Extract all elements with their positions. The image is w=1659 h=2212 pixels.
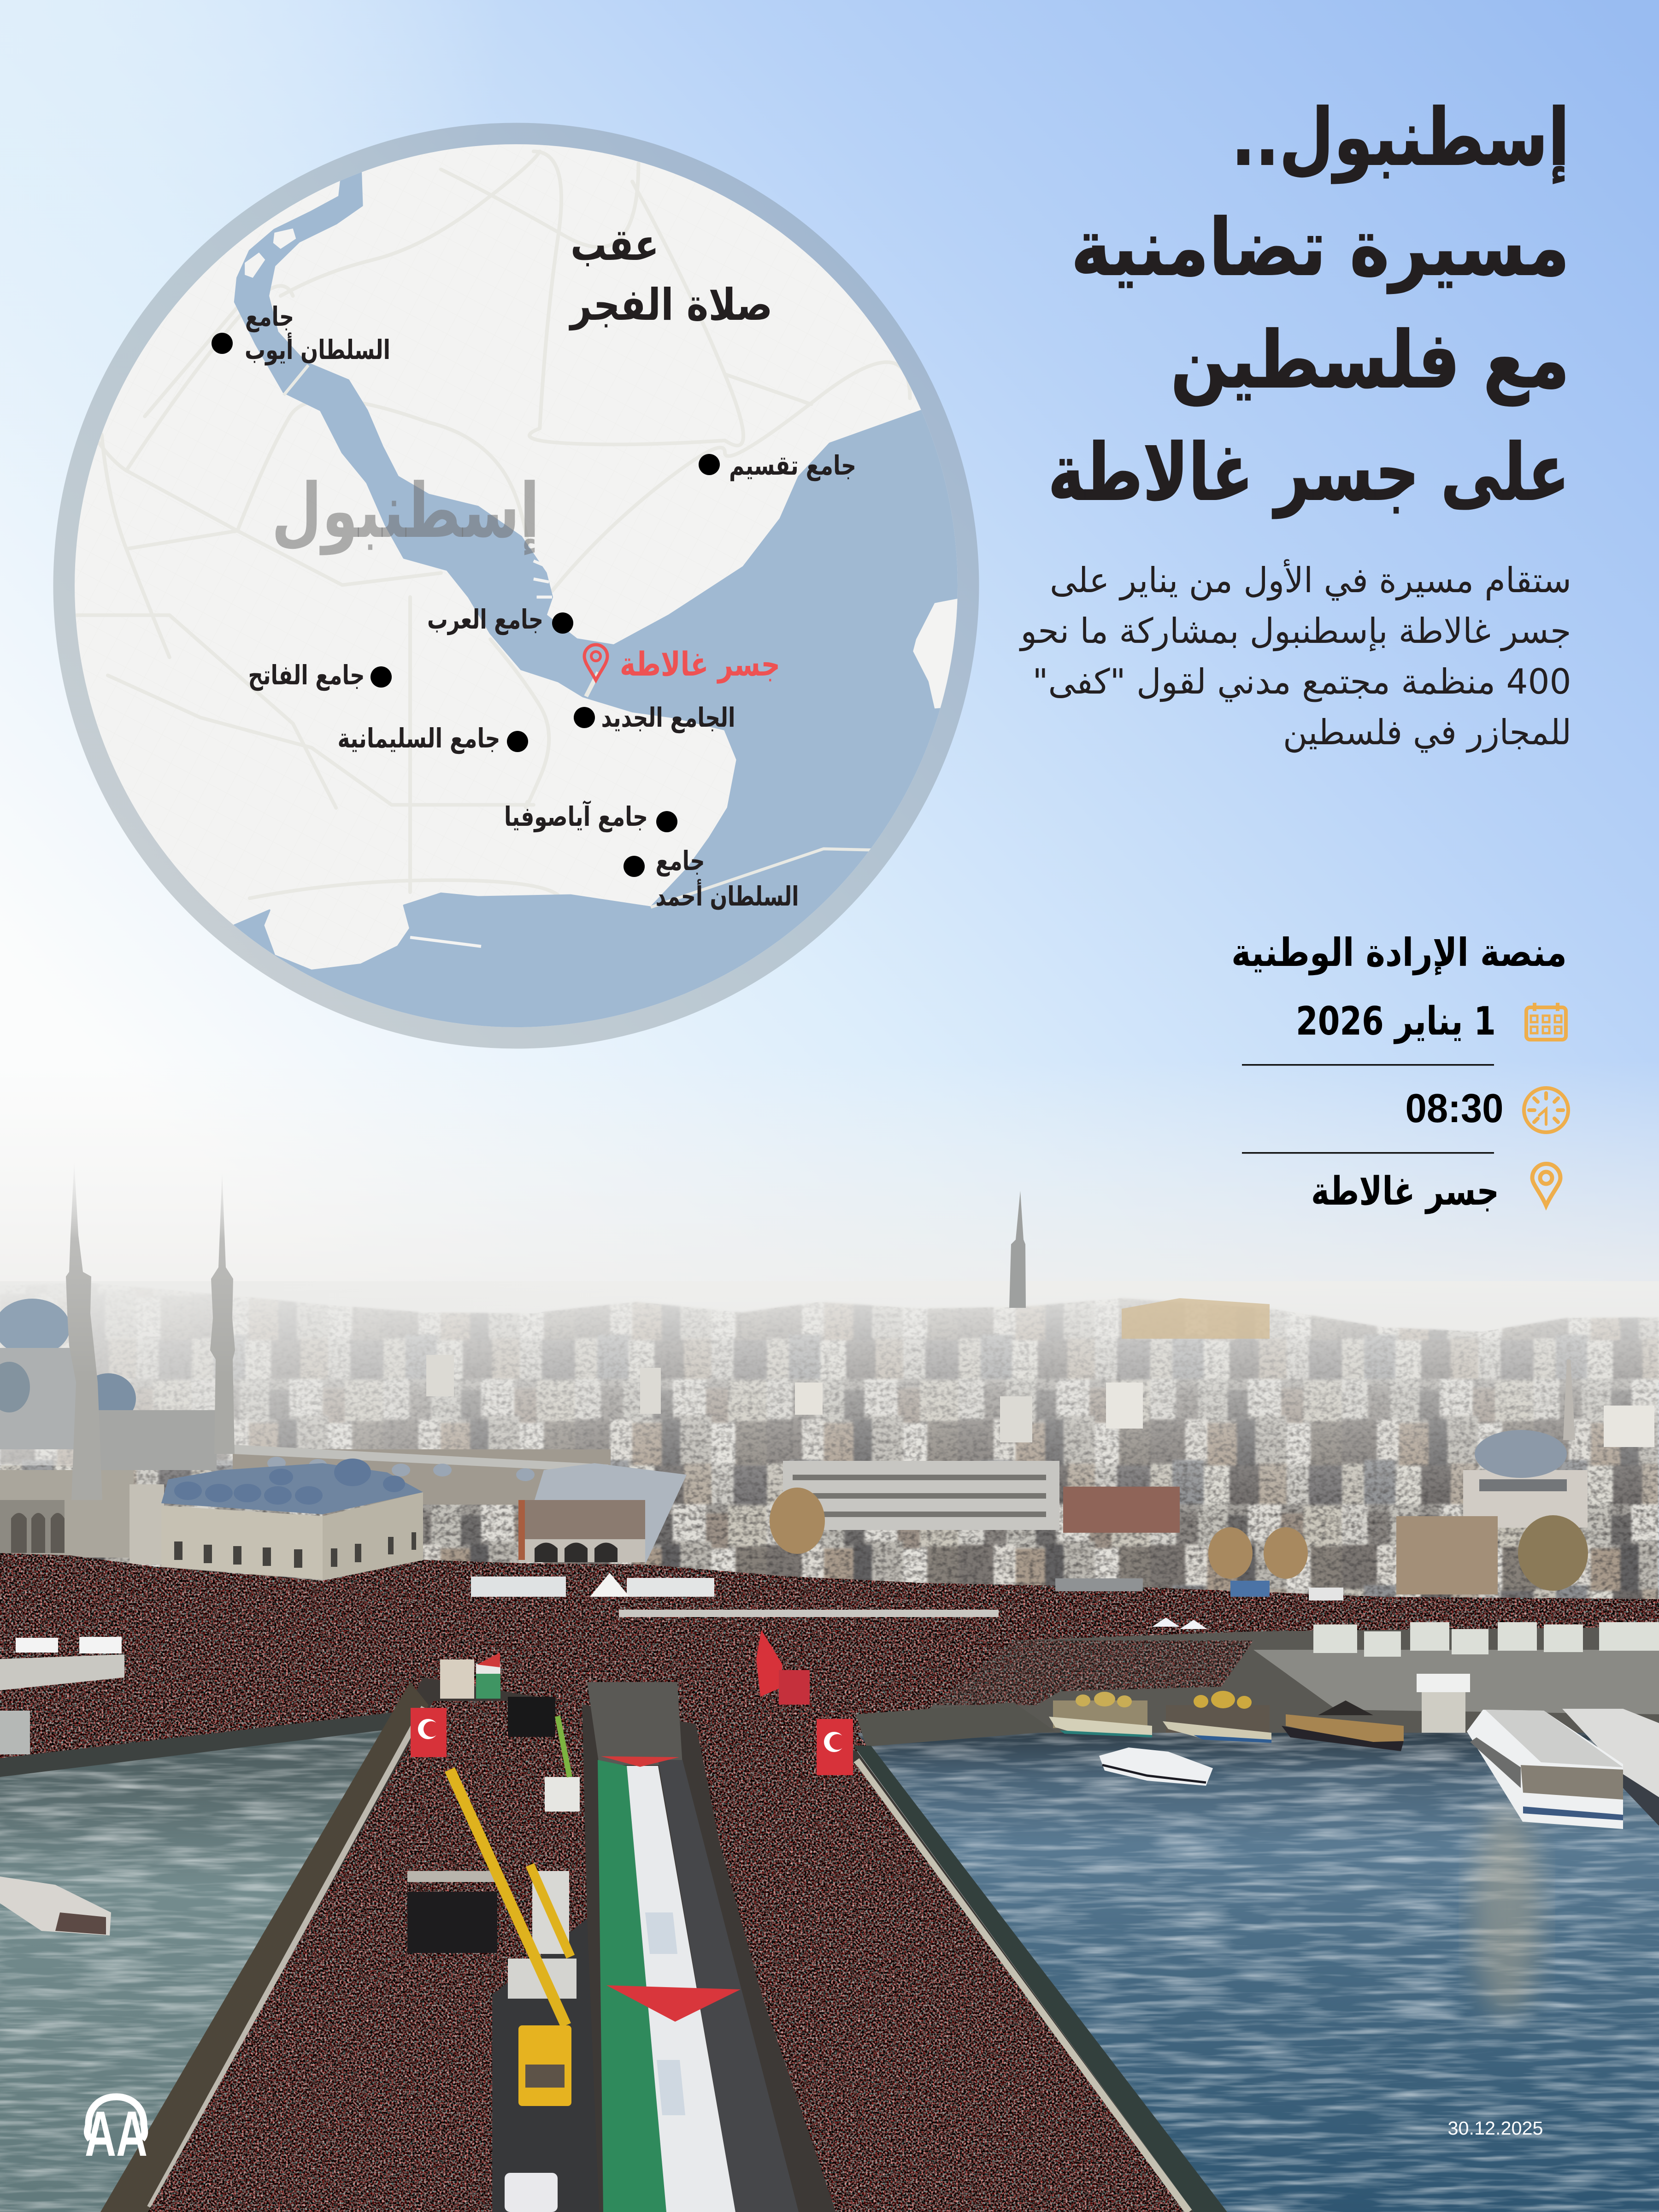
title: مسيرة تضامنية: [1071, 202, 1570, 294]
palestinian flag banner: [598, 1756, 799, 2212]
far ferry: [1562, 1709, 1659, 1826]
boat two: [1163, 1691, 1271, 1743]
quay pavement: [830, 1613, 1659, 1751]
intro paragraph: 400 منظمة مجتمع مدني لقول "كفى": [1032, 661, 1571, 702]
marker suleymaniye: جامع السليمانية: [337, 723, 500, 754]
marker sultan ahmed: [624, 845, 799, 912]
intro paragraph: ستقام مسيرة في الأول من يناير على: [1050, 559, 1571, 601]
small boat left: [0, 1877, 111, 1936]
marker sultan ahmed: جامع: [655, 845, 705, 877]
crowd patches near the pier: [922, 1641, 1253, 1705]
marker hagia sophia: جامع آياصوفيا: [504, 800, 648, 833]
left water: [0, 1724, 410, 2212]
marker eyup sultan: جامع: [245, 301, 294, 333]
yellow crane and trucks: [450, 1716, 580, 2106]
intro paragraph: للمجازر في فلسطين: [1283, 712, 1571, 753]
islands and piers: [913, 596, 971, 708]
icon: location pin: [1532, 1164, 1560, 1206]
new mosque left: [0, 1299, 611, 1580]
AA logo: [85, 2097, 147, 2170]
quay kiosks and trucks: [0, 1573, 1659, 1754]
white van: [505, 2173, 558, 2212]
upper crowd on the squares: [0, 1553, 1659, 1770]
marker eyup sultan: السلطان أيوب: [245, 332, 390, 366]
bridge deck: [100, 1677, 1227, 2212]
marker galata bridge: جسر غالاطة: [620, 645, 780, 684]
marker new mosque: الجامع الجديد: [601, 702, 735, 734]
date row: 1 يناير 2026: [1296, 999, 1496, 1044]
time row: 08:30: [1406, 1085, 1503, 1131]
marker eyup sultan: [212, 301, 390, 366]
marker new mosque: [574, 702, 735, 734]
turkish flag left: [411, 1708, 447, 1757]
icon: clock: [1524, 1088, 1568, 1132]
marker galata bridge: [584, 645, 780, 684]
marker sultan ahmed: السلطان أحمد: [655, 879, 799, 912]
marker arab mosque: جامع العرب: [427, 604, 543, 635]
label after fajr prayer: صلاة الفجر: [569, 280, 772, 330]
marker fatih: جامع الفاتح: [248, 659, 365, 691]
black speaker top: [508, 1697, 555, 1737]
stage truss: [407, 1871, 495, 1882]
AA logo: AA: [85, 2098, 147, 2170]
intro paragraph: جسر غالاطة بإسطنبول بمشاركة ما نحو: [1019, 611, 1571, 652]
city label istanbul: إسطنبول: [271, 468, 540, 555]
event details: [1231, 930, 1568, 1214]
title: مع فلسطين: [1171, 315, 1570, 406]
place row: جسر غالاطة: [1311, 1169, 1499, 1214]
right mosque: [1463, 1359, 1588, 1528]
crowd right of the flag: [687, 1677, 1184, 2212]
boat three: [1282, 1700, 1404, 1751]
intro paragraph: [1019, 559, 1571, 753]
water: [170, 170, 1064, 1109]
title: [1048, 92, 1570, 519]
crowd left of the flag: [148, 1701, 587, 2212]
label after fajr prayer: [569, 220, 772, 330]
tour boats: [1049, 1691, 1404, 1751]
organiser: منصة الإرادة الوطنية: [1231, 930, 1567, 976]
minarets: [66, 1162, 235, 1500]
icon: calendar: [1526, 1003, 1566, 1040]
date stamp: 30.12.2025: [1448, 2118, 1543, 2139]
marker taksim: جامع تقسيم: [729, 450, 856, 482]
right pier: [856, 1702, 1055, 1747]
label after fajr prayer: عقب: [571, 220, 659, 271]
city skyline: [0, 1281, 1659, 1622]
title: إسطنبول..: [1231, 92, 1570, 184]
map ring: [64, 134, 968, 1038]
central facades: [518, 1461, 1180, 1565]
water reflection under ferry: [1472, 1806, 1541, 2018]
pale apartment blocks: [426, 1355, 1654, 1447]
red banner: [779, 1670, 810, 1705]
turkish flag right: [817, 1719, 853, 1775]
turkish flag waving: [756, 1630, 783, 1697]
near ferry: [1467, 1710, 1623, 1829]
stage speaker block: [407, 1892, 497, 1953]
base map: [75, 144, 958, 1027]
beige palace: [1122, 1298, 1270, 1339]
bare trees: [770, 1488, 1588, 1594]
right water: [857, 1733, 1659, 2212]
poster and palestinian flag: [440, 1653, 500, 1699]
marker taksim: [699, 450, 856, 482]
police boat: [1099, 1747, 1213, 1786]
roads: [77, 151, 910, 898]
map circle: [53, 123, 979, 1049]
galata tower: [1009, 1191, 1026, 1308]
photo: Galata bridge march: [0, 1162, 1659, 2212]
left quay wall: [0, 1712, 400, 1777]
boat one: [1049, 1692, 1152, 1737]
